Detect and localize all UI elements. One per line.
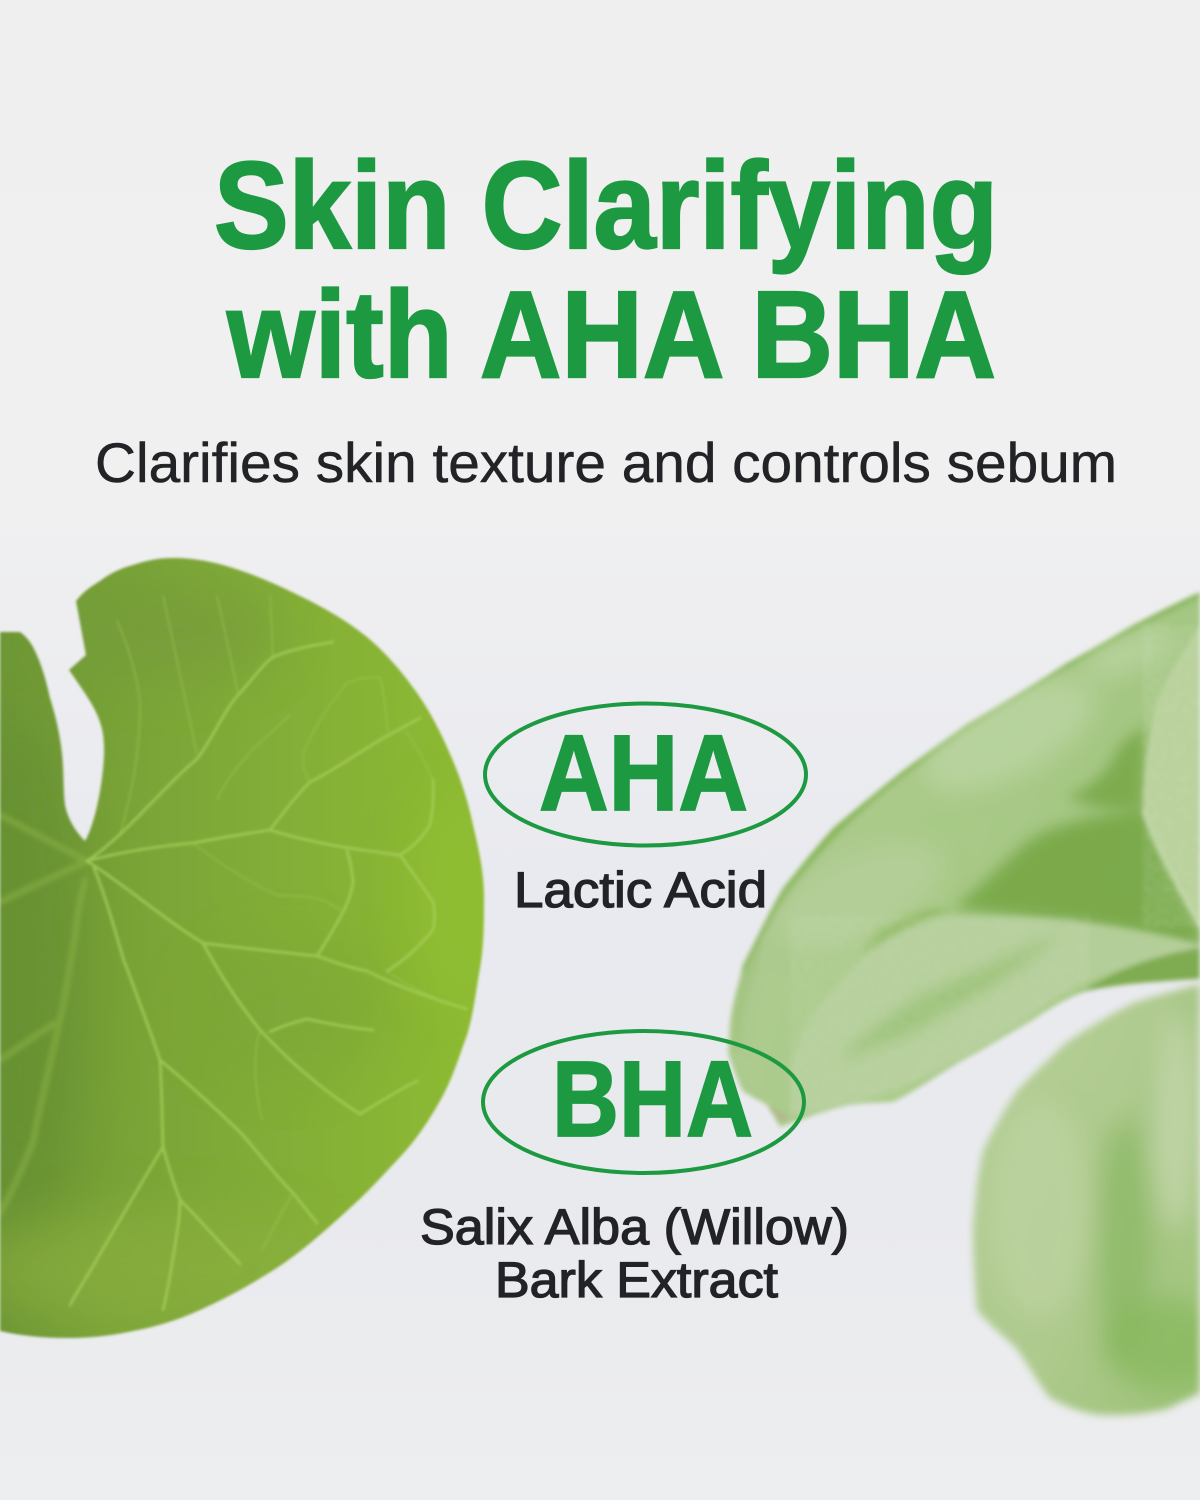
subtitle: Clarifies skin texture and controls sebum [95, 431, 1117, 494]
badge: AHA: AHA [539, 712, 748, 833]
label: Lactic Acid: Lactic Acid [514, 862, 767, 918]
badge: AHA [485, 704, 806, 846]
leaf grain [790, 916, 1090, 1116]
fine veins [117, 597, 433, 991]
label: Salix Alba (Willow) Bark Extract: Salix Alba (Willow) [420, 1199, 849, 1255]
photo: round green leaf on the left [0, 540, 500, 1350]
light lower strip [790, 916, 1200, 1115]
main veins [70, 642, 467, 1310]
shading [54, 854, 68, 1122]
upper leaf [720, 585, 1200, 1135]
title [214, 138, 998, 404]
green rim [740, 592, 1200, 970]
title: with AHA BHA [226, 267, 996, 404]
title: Skin Clarifying [214, 138, 998, 275]
label: Salix Alba (Willow) Bark Extract: Bark Extract [495, 1252, 778, 1308]
pale upper panel [918, 670, 1098, 794]
label: Salix Alba (Willow) Bark Extract [420, 1199, 849, 1308]
dark central band [953, 808, 1200, 948]
blurred veins of the out-of-focus lobe [0, 815, 87, 1213]
dark lower strip fold [1082, 946, 1200, 993]
leaf tip [768, 1105, 790, 1121]
lower lobe [960, 970, 1200, 1420]
right folded lobe [1143, 625, 1200, 927]
badge: BHA [483, 1031, 804, 1173]
badge: BHA: BHA [552, 1038, 753, 1159]
photo: out-of-focus leaf on the right [720, 585, 1200, 1420]
